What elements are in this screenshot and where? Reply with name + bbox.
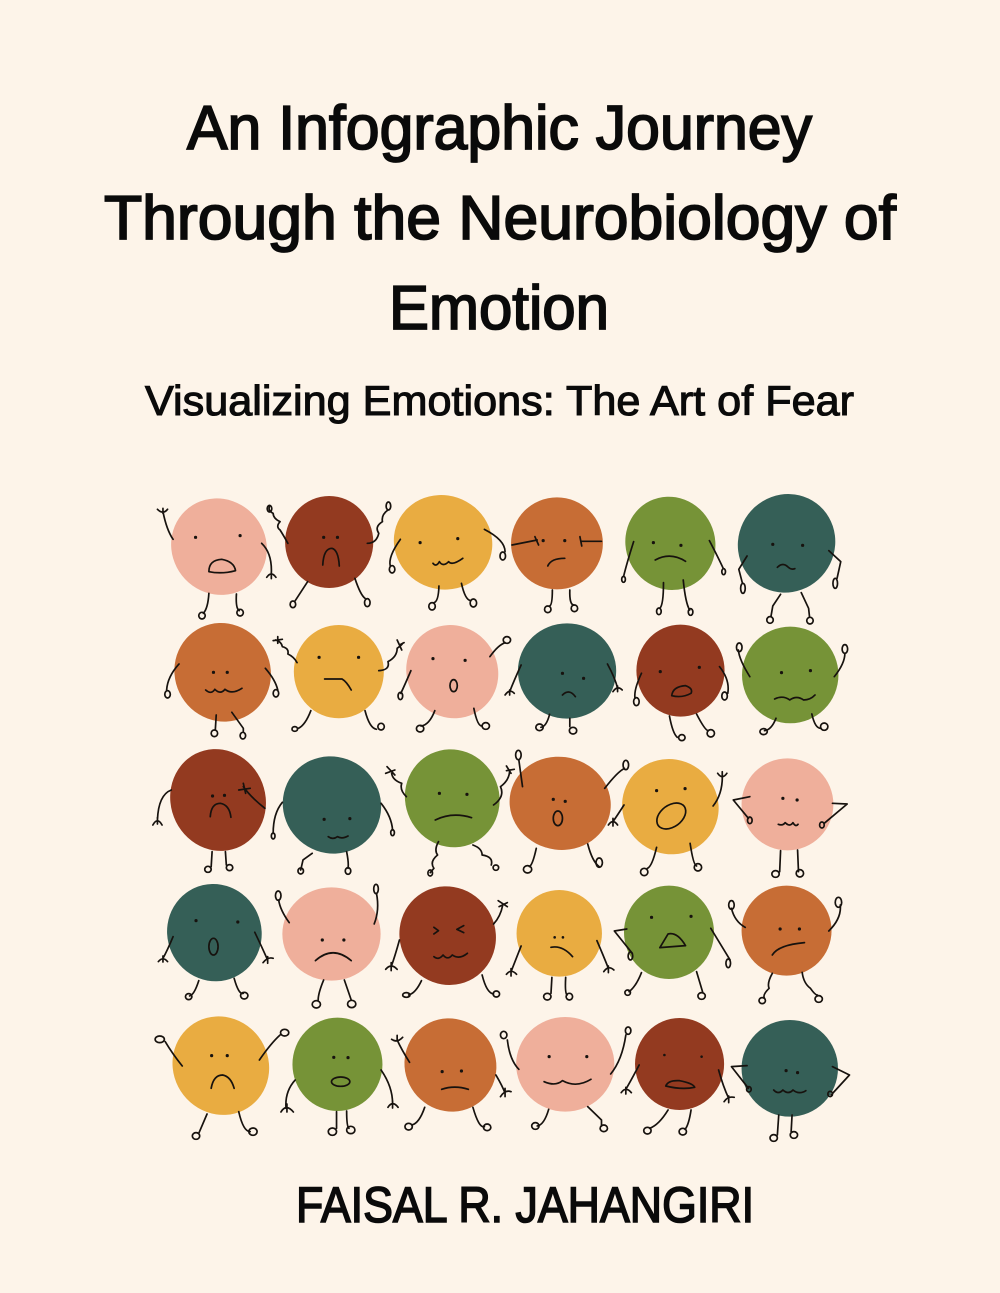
title: An Infographic Journey bbox=[187, 94, 812, 163]
character: yellow frown, arms raised bbox=[155, 1014, 289, 1139]
character: red wide open mouth bbox=[621, 1018, 734, 1135]
character: teal wavy mouth bbox=[271, 755, 394, 874]
character: orange skewed frown bbox=[729, 886, 842, 1004]
character: orange wavy mouth bbox=[165, 621, 279, 739]
character: orange arms across face bbox=[511, 497, 603, 613]
character: pink small o mouth bbox=[398, 623, 511, 732]
character: yellow small frown bbox=[506, 890, 614, 1000]
character: green open mouth bbox=[614, 886, 731, 999]
character: orange flat frown bbox=[392, 1017, 511, 1131]
character: yellow wavy mouth bbox=[389, 493, 506, 610]
character: red hand on face bbox=[153, 747, 271, 872]
title bbox=[104, 94, 897, 343]
character: yellow large o mouth bbox=[608, 757, 727, 876]
character: teal small frown bbox=[734, 492, 841, 624]
rows 1 and 2 of characters bbox=[157, 492, 848, 741]
character: pink hands on hips bbox=[733, 758, 847, 877]
title: Through the Neurobiology of bbox=[104, 184, 897, 253]
character: yellow crooked mouth bbox=[273, 625, 404, 731]
character: red squinting bbox=[386, 885, 507, 997]
character: orange surprised bbox=[505, 750, 629, 873]
character: pink frown, arms raised bbox=[275, 884, 381, 1008]
character: pink wavy mouth bbox=[500, 1017, 631, 1132]
character: pink open mouth bbox=[157, 496, 276, 619]
character: teal small frown bbox=[505, 623, 622, 734]
row 5 of characters bbox=[155, 1014, 849, 1141]
character: green wavy limbs bbox=[386, 748, 514, 876]
character: green wavy mouth bbox=[737, 627, 848, 735]
character grid bbox=[153, 492, 849, 1141]
title: Emotion bbox=[389, 274, 609, 343]
character: green frown bbox=[622, 495, 725, 615]
subtitle: Visualizing Emotions: The Art of Fear bbox=[145, 377, 854, 424]
rows 3 and 4 of characters bbox=[153, 747, 847, 1008]
character: green oval mouth bbox=[281, 1018, 398, 1135]
character: red open mouth bbox=[634, 625, 728, 741]
character: red frown bbox=[267, 496, 391, 608]
character: teal o mouth bbox=[158, 883, 273, 1000]
character: teal hands on hips bbox=[731, 1020, 849, 1141]
author name: FAISAL R. JAHANGIRI bbox=[296, 1177, 754, 1233]
